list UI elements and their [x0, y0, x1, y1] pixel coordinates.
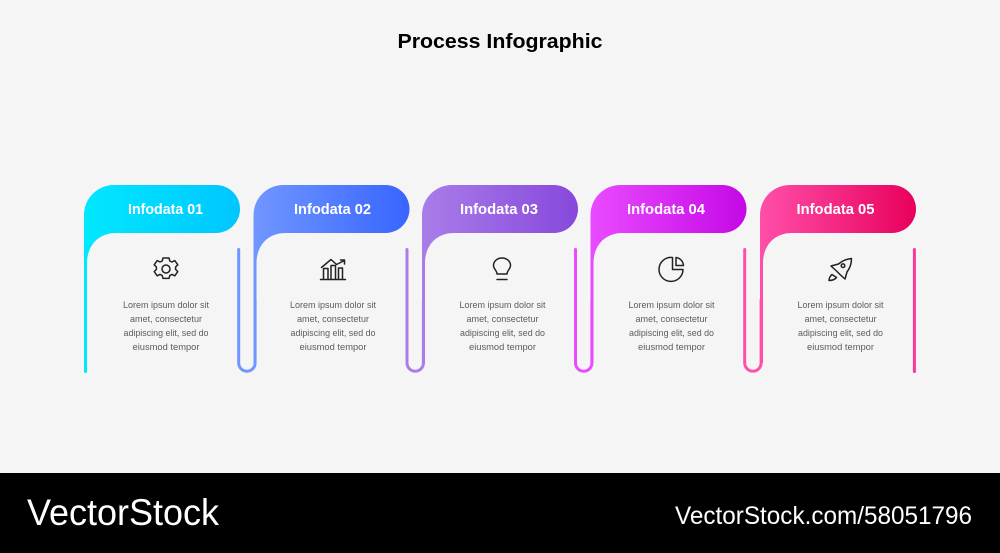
text block 02: amet, consectetur	[297, 314, 369, 325]
text block 03: Lorem ipsum dolor sit	[460, 300, 546, 311]
text block 01: adipiscing elit, sed do	[124, 328, 208, 339]
icon: pie chart	[659, 257, 684, 281]
icon: light bulb	[494, 258, 510, 280]
text block 04: amet, consectetur	[636, 314, 708, 325]
header tab 04	[590, 185, 746, 363]
text block 04: Lorem ipsum dolor sit	[628, 300, 715, 311]
icon: bar chart	[320, 260, 346, 280]
watermark bar	[0, 473, 1000, 553]
heading 03: Infodata 03	[460, 202, 538, 218]
header tab 05	[760, 185, 916, 363]
text block 02: eiusmod tempor	[300, 342, 366, 353]
connector 02 to 03	[407, 250, 423, 371]
connector 01 to 02	[239, 250, 255, 371]
icon: rocket	[829, 258, 852, 280]
text block 04: eiusmod tempor	[638, 342, 705, 353]
icon: gear	[154, 258, 178, 278]
header tab 03	[422, 185, 578, 363]
heading 05: Infodata 05	[796, 202, 874, 218]
header tab 01	[84, 185, 240, 373]
panel: Infodata 03	[407, 185, 578, 371]
text block 02	[290, 300, 376, 353]
text block 03	[460, 300, 546, 353]
heading 02: Infodata 02	[294, 202, 371, 218]
text block 01: amet, consectetur	[130, 314, 202, 325]
heading 01: Infodata 01	[128, 202, 203, 218]
header tab 02	[254, 185, 410, 363]
connector 03 to 04	[576, 250, 592, 371]
text block 03: amet, consectetur	[466, 314, 538, 325]
text block 04: adipiscing elit, sed do	[629, 328, 714, 339]
text block 05: adipiscing elit, sed do	[798, 328, 883, 339]
text block 01: Lorem ipsum dolor sit	[123, 300, 209, 311]
text block 05: Lorem ipsum dolor sit	[798, 300, 884, 311]
text block 03: eiusmod tempor	[469, 342, 536, 353]
VectorStock URL: VectorStock.com/58051796	[675, 502, 972, 530]
text block 02: adipiscing elit, sed do	[290, 328, 376, 339]
VectorStock logo text: VectorStock	[27, 492, 219, 533]
text block 01	[123, 300, 209, 353]
text block 05	[798, 300, 884, 353]
panel: Infodata 04	[576, 185, 746, 371]
heading 04: Infodata 04	[627, 202, 705, 218]
text block 04	[628, 300, 715, 353]
end stem	[913, 250, 916, 372]
text block 03: adipiscing elit, sed do	[460, 328, 545, 339]
text block 01: eiusmod tempor	[132, 342, 200, 353]
panel: Infodata 01	[84, 185, 240, 373]
panel: Infodata 05	[745, 185, 916, 372]
text block 05: amet, consectetur	[804, 314, 876, 325]
text block 02: Lorem ipsum dolor sit	[290, 300, 376, 311]
title: Process Infographic	[398, 31, 602, 53]
text block 05: eiusmod tempor	[807, 342, 874, 353]
panel: Infodata 02	[239, 185, 410, 371]
connector 04 to 05	[745, 250, 761, 371]
